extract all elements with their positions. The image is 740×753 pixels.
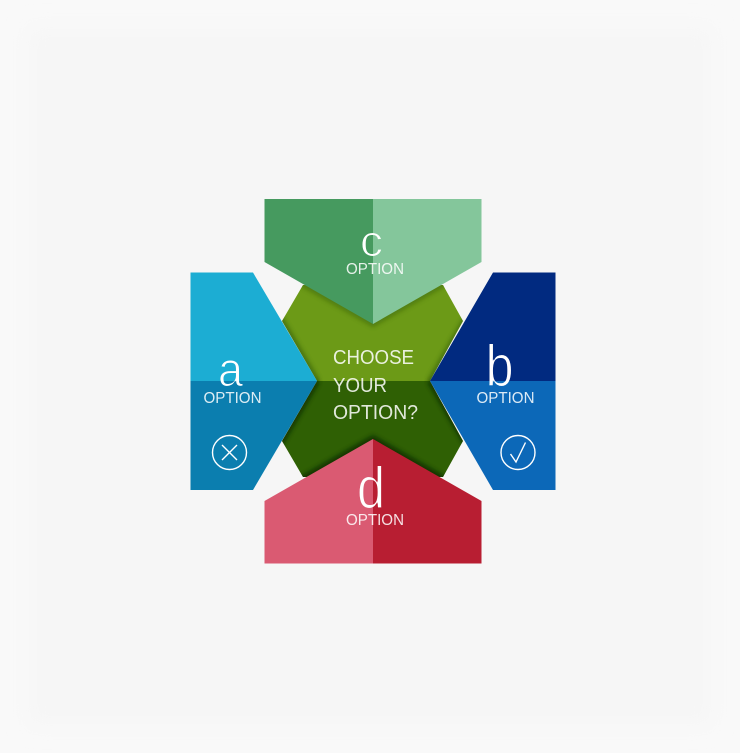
text: choose your option: CHOOSE <box>333 347 414 369</box>
panel: option d <box>264 439 482 564</box>
letter b: b <box>486 334 514 399</box>
panel: option c <box>264 199 482 324</box>
text: choose your option: OPTION? <box>333 402 418 424</box>
panel: centre hexagon <box>282 285 463 477</box>
letter c: c <box>360 217 383 266</box>
panel: option a <box>190 272 317 490</box>
letter d: d <box>357 456 385 521</box>
icon: check in circle <box>501 436 535 470</box>
label: option d: OPTION <box>346 512 404 529</box>
text: choose your option <box>333 347 418 424</box>
infographic <box>190 199 556 564</box>
icon: cross in circle <box>212 436 246 470</box>
label: option a: OPTION <box>204 390 262 407</box>
letter a: a <box>218 344 243 397</box>
panel: option b <box>430 272 556 490</box>
label: option c: OPTION <box>346 261 404 278</box>
text: choose your option: YOUR <box>333 375 387 397</box>
label: option b: OPTION <box>476 390 534 407</box>
